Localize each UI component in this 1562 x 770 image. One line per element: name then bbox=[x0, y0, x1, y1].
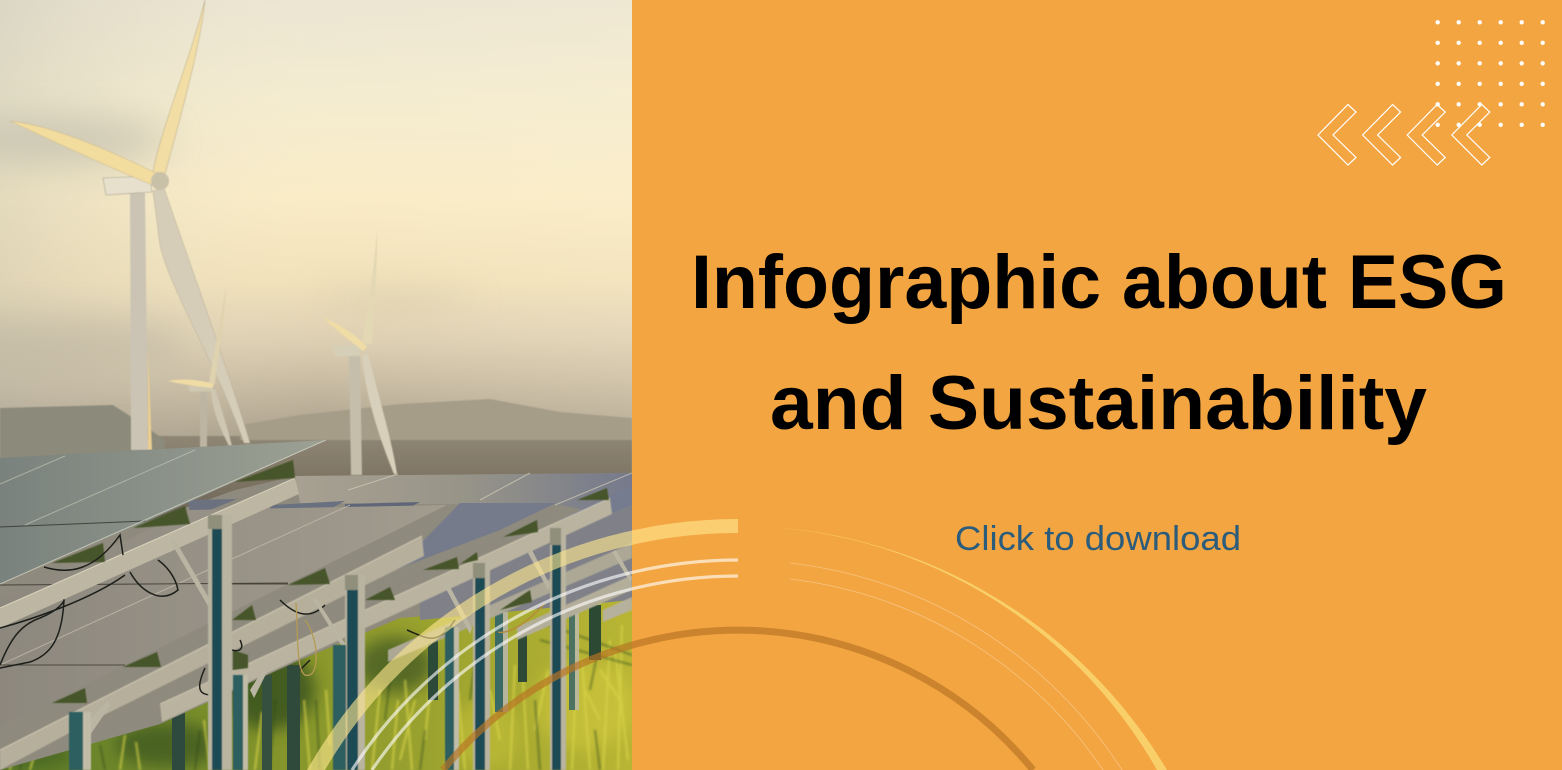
grass bbox=[0, 590, 635, 770]
photo: wind turbines and solar panels bbox=[0, 0, 635, 770]
distant hills bbox=[0, 399, 632, 526]
post 7 bbox=[333, 645, 346, 770]
solar panels rear row bbox=[0, 473, 632, 770]
post 5 bbox=[233, 675, 248, 770]
brown arc bbox=[443, 630, 1033, 770]
post 6 bbox=[69, 712, 91, 770]
post 3 bbox=[473, 563, 490, 770]
decorative arcs bbox=[307, 519, 1167, 770]
title: Infographic about ESG bbox=[691, 240, 1507, 325]
post 4 bbox=[550, 528, 566, 770]
title: and Sustainability bbox=[770, 361, 1427, 446]
post 2 bbox=[345, 575, 365, 770]
white arcs bbox=[352, 560, 738, 770]
cables bbox=[0, 535, 455, 695]
solar panel middle row bbox=[0, 504, 446, 666]
post 1 bbox=[208, 515, 232, 770]
dot grid bbox=[1436, 20, 1545, 127]
post 8 bbox=[445, 627, 459, 770]
sky bbox=[0, 0, 632, 470]
chevron arrows bbox=[1318, 104, 1490, 165]
subtitle: call to action: Click to download bbox=[955, 520, 1241, 558]
wind turbine right bbox=[323, 228, 397, 475]
wind turbine large bbox=[10, 0, 250, 450]
diagonal struts bbox=[85, 538, 632, 735]
front posts bbox=[69, 515, 566, 770]
rear posts bbox=[172, 600, 601, 770]
solar panel front row bbox=[0, 440, 326, 628]
panel brackets bbox=[52, 460, 609, 703]
support beams bbox=[0, 498, 632, 770]
orange panel bbox=[632, 0, 1562, 770]
wind turbine small bbox=[168, 285, 232, 447]
title bbox=[691, 240, 1507, 446]
thick yellow arc bbox=[307, 519, 738, 770]
